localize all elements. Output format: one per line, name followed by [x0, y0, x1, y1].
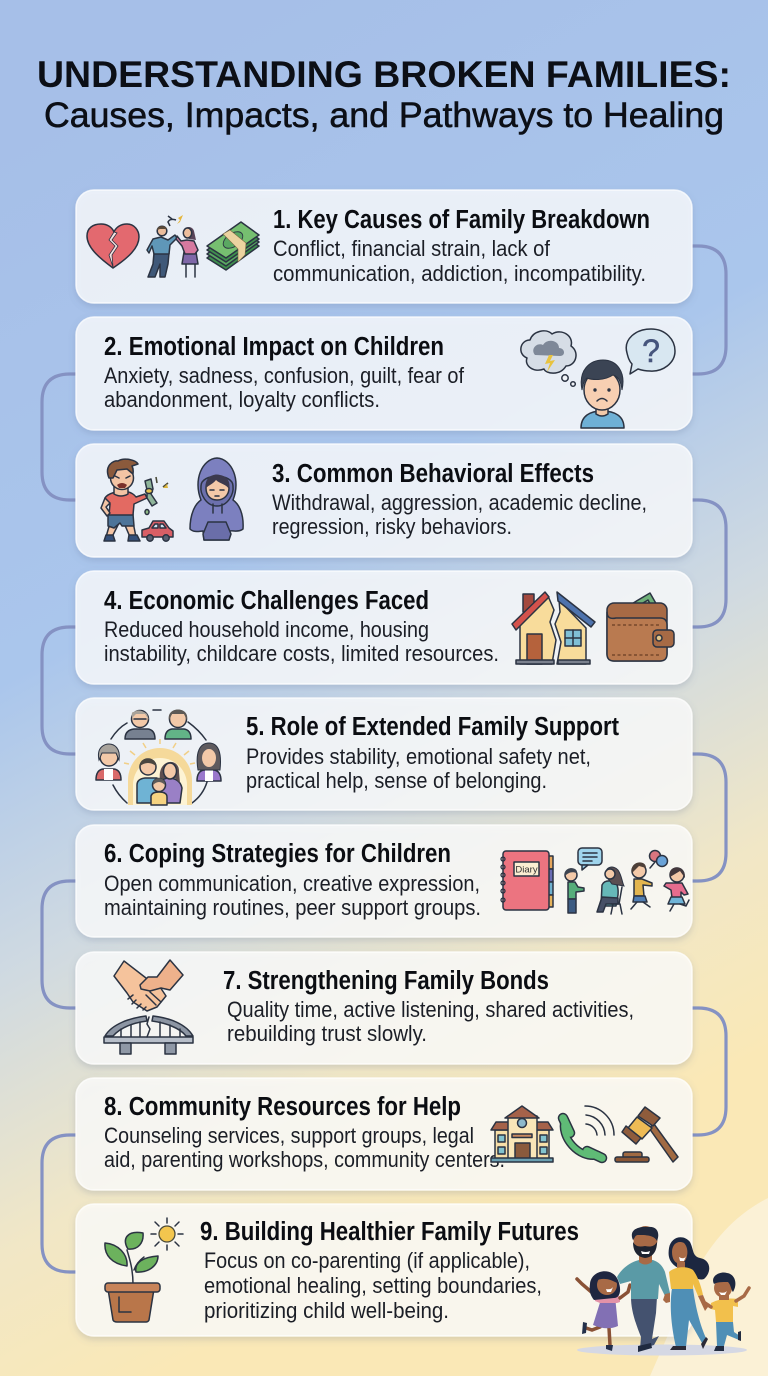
body 1: communication, addiction, incompatibility. [273, 261, 646, 286]
connector 6 to 7 [42, 881, 76, 1008]
body 9 [204, 1248, 542, 1323]
heading 9: 9. Building Healthier Family Futures [200, 1218, 579, 1246]
body 5 [246, 744, 591, 793]
mom [669, 1237, 709, 1350]
icon: diary [501, 851, 553, 910]
girl [577, 1271, 630, 1351]
body 3: regression, risky behaviors. [272, 514, 512, 539]
panel 6: coping strategies [76, 825, 692, 937]
icon: question speech bubble: ? [642, 333, 660, 369]
title [37, 54, 731, 135]
icon: wallet [607, 593, 674, 661]
body 9: Focus on co-parenting (if applicable), [204, 1248, 530, 1273]
icon: gavel [615, 1107, 678, 1162]
icon: storm thought cloud [521, 331, 576, 386]
panel 2: emotional impact [76, 317, 692, 430]
body 6 [104, 871, 481, 920]
icon: children playing with balloons [631, 850, 689, 911]
heading 7: 7. Strengthening Family Bonds [223, 967, 549, 995]
heading 5: 5. Role of Extended Family Support [246, 713, 619, 741]
panel 4: economic challenges [76, 571, 692, 684]
body 6: maintaining routines, peer support groups. [104, 895, 481, 920]
panel 5: extended family [76, 698, 692, 810]
panel 7: strengthening bonds [76, 952, 692, 1064]
heading 1: 1. Key Causes of Family Breakdown [273, 206, 650, 234]
body 2: abandonment, loyalty conflicts. [104, 387, 380, 412]
icon: arguing couple [147, 215, 198, 277]
body 4 [104, 617, 499, 666]
body 2 [104, 363, 465, 412]
icon: phone [563, 1106, 614, 1158]
body 8: aid, parenting workshops, community centers. [104, 1147, 505, 1172]
connector 5 to 6 [692, 754, 726, 881]
icon: handshake [114, 960, 183, 1011]
connector 7 to 8 [692, 1008, 726, 1135]
title: Causes, Impacts, and Pathways to Healing [44, 96, 724, 135]
icon: child talking with adult [565, 848, 624, 914]
icon: broken bridge [104, 1016, 193, 1054]
icon: sprout in pot [105, 1232, 160, 1322]
body 1: Conflict, financial strain, lack of [273, 236, 551, 261]
connector 4 to 5 [42, 627, 76, 754]
panel 1: key causes [76, 190, 692, 303]
body 8: Counseling services, support groups, legal [104, 1123, 474, 1148]
body 7 [227, 997, 634, 1046]
heading 6: 6. Coping Strategies for Children [104, 840, 451, 868]
body 1 [273, 236, 646, 286]
body 9: emotional healing, setting boundaries, [204, 1273, 542, 1298]
panel 8: community resources [76, 1078, 692, 1190]
connector 8 to 9 [42, 1135, 76, 1272]
panel 3: behavioral effects [76, 444, 692, 557]
heading 3: 3. Common Behavioral Effects [272, 460, 594, 488]
title: UNDERSTANDING BROKEN FAMILIES: [37, 54, 731, 95]
body 2: Anxiety, sadness, confusion, guilt, fear of [104, 363, 465, 388]
icon: cracked house [512, 592, 595, 664]
icon: broken heart [87, 224, 139, 268]
body 8 [104, 1123, 505, 1172]
icon: extended family circle [96, 710, 221, 805]
body 9: prioritizing child well-being. [204, 1298, 449, 1323]
icon: stack of money [207, 222, 259, 270]
connector 1 to 2 [692, 246, 726, 374]
body 4: Reduced household income, housing [104, 617, 429, 642]
heading 8: 8. Community Resources for Help [104, 1093, 461, 1121]
body 3 [272, 490, 647, 539]
body 7: rebuilding trust slowly. [227, 1021, 427, 1046]
icon: community center [491, 1106, 553, 1162]
boy [705, 1273, 749, 1351]
icon: sun [151, 1218, 183, 1250]
body 4: instability, childcare costs, limited resources. [104, 641, 499, 666]
icon: sad boy [581, 360, 624, 428]
heading 2: 2. Emotional Impact on Children [104, 333, 444, 361]
body 6: Open communication, creative expression, [104, 871, 480, 896]
icon: diary: Diary [515, 864, 538, 876]
body 7: Quality time, active listening, shared activities, [227, 997, 634, 1022]
panel 9: healthier futures [76, 1204, 749, 1356]
icon: question speech bubble [626, 329, 675, 374]
body 5: practical help, sense of belonging. [246, 768, 547, 793]
icon: angry boy and car [101, 459, 173, 541]
icon: hooded teen [190, 458, 243, 540]
body 5: Provides stability, emotional safety net, [246, 744, 591, 769]
dad [617, 1226, 670, 1352]
connector 2 to 3 [42, 374, 76, 500]
body 3: Withdrawal, aggression, academic decline, [272, 490, 647, 515]
illustration: happy family walking [577, 1226, 749, 1356]
connector 3 to 4 [692, 500, 726, 627]
heading 4: 4. Economic Challenges Faced [104, 587, 429, 615]
